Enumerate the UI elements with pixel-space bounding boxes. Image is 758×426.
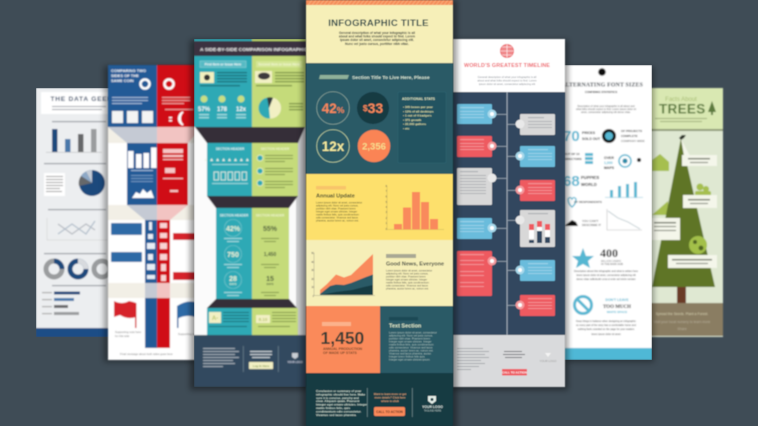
statistic: people: [564, 152, 593, 164]
paragraph: donec vitae sollicitudin urna ut enim ad minim veniam: [576, 278, 636, 281]
body text: [386, 268, 432, 290]
panel: footer: [306, 373, 453, 426]
right events: [516, 114, 555, 316]
footer: [194, 335, 306, 387]
donut stat: OF PROJECTS: [621, 129, 642, 133]
body text: Integer eget ornare ultricies. Integer: [316, 210, 357, 214]
column: teal top: 12x: [236, 107, 247, 113]
summary text: infographic should live here. Make: [316, 392, 366, 396]
heading: SIDES OF THE: [111, 73, 139, 78]
callout: don't leave: WHITE SPACE: [607, 310, 627, 314]
callout: don't leave: TOO MUCH: [603, 305, 631, 310]
panel: alternating font sizes: [561, 65, 652, 360]
statistic: 400: IN THE MAIN HUB: [601, 262, 623, 266]
paragraph lines: [112, 97, 148, 104]
pie chart: [79, 170, 105, 196]
target stat: 1,000: [604, 161, 613, 165]
heading: WORLD'S GREATEST TIMELINE: [464, 63, 550, 69]
heading: facts about trees: TREES: [659, 102, 706, 116]
area chart: 30: [311, 269, 315, 272]
icon tiles: [112, 111, 153, 123]
logo: [422, 396, 443, 412]
body text: Vivamus sed lacus pharetra, auctor.: [389, 352, 432, 356]
caption: ANNUAL PRODUCTION: [323, 347, 363, 351]
section: stats teal: 42%: [226, 226, 241, 233]
callout: don't leave: [603, 298, 631, 314]
caption lines: Final message about both sides goes here: [120, 352, 173, 356]
stat: $33: 33: [368, 100, 383, 116]
body text: Integer lorem finibus felis quis.: [389, 354, 426, 358]
bar graphic panel: [127, 143, 188, 205]
mountain stat: [564, 219, 601, 227]
body text: [389, 330, 437, 362]
histogram: 3: [386, 211, 388, 214]
icon: red flag: [114, 301, 136, 328]
stat: $33: [357, 92, 389, 124]
shadow: timeline panel: [452, 40, 568, 390]
header: [306, 0, 453, 63]
statistic: 68 puppies: 68: [563, 173, 580, 190]
section: stats teal: 28: [229, 276, 237, 283]
column: teal top: 57%: [198, 107, 211, 113]
timeline connectors: [493, 114, 521, 306]
body text: Integer eget ornare ultricies. Integer: [389, 340, 432, 344]
footer: YOUR LOGO: [287, 361, 303, 364]
intro text: [477, 75, 537, 86]
paragraph: [574, 270, 639, 281]
callout text: [654, 158, 712, 264]
logo: YOUR LOGO: [422, 405, 443, 409]
statistic: 400: 400: [600, 246, 618, 260]
icon: blue flag: [177, 302, 195, 328]
closing paragraph: [576, 320, 637, 336]
panel: timeline: [453, 39, 565, 387]
area chart: [311, 252, 375, 298]
heading: COMPARING TWO: [111, 68, 146, 73]
footer: CALL TO ACTION: [502, 371, 527, 375]
summary text: Conclusion or summary of your: [316, 389, 362, 393]
icon: equals and crescent: [169, 112, 183, 125]
target stat: MAPS: [604, 166, 615, 170]
footer: Log In Here: [253, 364, 270, 368]
title: INFOGRAPHIC TITLE: [328, 18, 429, 29]
summary text: condimentum odio consectetur.: [316, 409, 362, 413]
stat: 42%: [317, 92, 349, 124]
body text: mattis finibus felis, quis condimentum: [389, 342, 434, 346]
mountain stat: DESCRIBE IT: [582, 223, 601, 227]
bar chart: [46, 129, 102, 153]
statistic: 70: 70: [563, 128, 580, 145]
closing paragraph: nothing feels crowded on the page for your readers: [578, 328, 635, 331]
funnel band 2: [207, 196, 298, 208]
caption: [323, 347, 363, 355]
column: teal top: [194, 56, 252, 127]
heading: CONFIDING STATISTICS: [585, 90, 617, 94]
body text: adipiscing elit. Nunc vel justo cursus,: [386, 272, 429, 276]
intro text: what folks should expect to find. Lorem ipsum dolor sit: [576, 108, 636, 111]
intro text: [576, 105, 636, 114]
call to action text: more details? Click here: [374, 396, 406, 400]
icon: house: [652, 154, 669, 171]
grade row: 8.10: [259, 317, 268, 322]
paragraph: lorem ipsum dolor sit amet, consectetur adipiscing elit: [576, 274, 636, 277]
mountain stat: YOU CAN'T: [582, 219, 599, 223]
statistic: 70: [564, 130, 600, 142]
intro text: General description of what your infographic is all: [478, 75, 537, 79]
bar chart: [605, 182, 643, 198]
body text: adipiscing elit. Nunc vel justo cursus,: [389, 334, 433, 338]
callout: don't leave: DON'T LEAVE: [605, 298, 629, 302]
panel: stats: [306, 63, 453, 174]
section: icons teal: SECTION HEADER: [216, 147, 245, 151]
description: ipsum dolor sit amet, consectetur adipiscing elit.: [340, 38, 414, 42]
heading: Text Section: [389, 324, 422, 330]
panel: good news: [306, 240, 453, 306]
section: stats green: 1,450: [264, 252, 276, 258]
icon: no sign: [574, 296, 592, 314]
intro text: ipsum dolor sit amet, consectetur adipiscing elit: [479, 82, 535, 86]
section: stats teal: DAYS: [230, 282, 237, 286]
statistic: people: DIRECTORS: [564, 157, 582, 161]
stat: 2,356: 2,356: [362, 142, 386, 152]
summary text: Integer eget ornare ultricies. Integer: [316, 403, 368, 407]
icon: people: [695, 184, 711, 196]
body text: Integer eget ornare ultricies ipsum.: [389, 358, 431, 362]
shadow: fonts panel: [566, 67, 654, 362]
column: teal top: First Item or Issue Here: [205, 63, 241, 67]
histogram: 5: [386, 201, 388, 204]
statistic: 70: SOLD OUT: [582, 137, 601, 141]
stat: 2,356: [358, 130, 390, 162]
shadow: comparison panel: [190, 40, 308, 390]
stat: 42%: 42%: [322, 101, 345, 116]
grade row: A-: [212, 316, 218, 322]
donut stat: COMPANY-WIDE: [621, 139, 645, 143]
closing paragraph: lorem ipsum dolor sit amet: [591, 333, 621, 336]
panel: 1,450 stat: [306, 306, 380, 373]
line chart: [607, 209, 642, 230]
pie chart: [258, 97, 281, 119]
button: CALL TO ACTION: [376, 410, 404, 414]
additional stats: • 345 boxes per year: [403, 105, 434, 109]
body text: mattis finibus felis, quis condimentum: [316, 212, 359, 216]
summary text: mattis finibus felis, quis: [316, 406, 351, 410]
statistic: 68 puppies: PUPPIES: [581, 175, 599, 180]
grade row: [207, 308, 298, 335]
funnel 2: [108, 205, 195, 220]
summary text: sure it is concise, punchy and: [316, 396, 359, 400]
line chart: [46, 220, 96, 240]
statistic: 400: [600, 246, 623, 266]
body text: pharetra, auctor lorem ac, rutrum est.: [316, 218, 359, 222]
stat: 12x: 12x: [322, 139, 345, 154]
intro lines: [52, 106, 106, 110]
statistic: 68 puppies: WORLD: [581, 182, 597, 187]
section: stats green: SECTION HEADER: [256, 214, 285, 218]
donut charts: [46, 261, 110, 277]
tree illustration: [652, 135, 715, 303]
area chart: 0: [313, 295, 315, 298]
section: stats teal: [216, 208, 252, 299]
bar labels: [42, 292, 52, 314]
body text: Lorem ipsum dolor sit amet, consectetur: [316, 200, 362, 204]
subtitle lines: [655, 118, 707, 122]
panel: main infographic: [306, 0, 453, 426]
body text: [316, 200, 362, 222]
shadow: red panel: [104, 66, 196, 362]
icon: triangle: [652, 201, 668, 215]
histogram: 0: [386, 228, 388, 231]
text block: [44, 173, 65, 196]
panel: comparing two sides: [108, 65, 198, 360]
summary text: Vivamus sed lacus pharetra.: [316, 413, 357, 417]
heading: [561, 82, 643, 94]
funnel 1: [108, 127, 195, 143]
body text: porttitor nibh vitae. Praesent lorem: [316, 206, 356, 210]
side labels: [111, 223, 195, 280]
body text: odio consectetur. Vivamus sed lacus: [316, 216, 359, 220]
body text: mattis finibus felis, quis condimentum: [386, 280, 429, 284]
timeline axis: [506, 92, 508, 335]
heading: [111, 68, 146, 83]
button: [374, 407, 405, 416]
left events: [457, 104, 496, 296]
horizontal bars: [54, 292, 80, 315]
funnel band 3: [207, 299, 297, 308]
target stat: OVER: [604, 156, 614, 160]
histogram: 2: [386, 217, 388, 220]
heart stat: OF RESPONDENTS: [574, 200, 602, 204]
call to action text: [374, 392, 406, 403]
logo: TAGLINE HERE: [424, 410, 442, 412]
statistic: 70: PRICES: [582, 131, 596, 135]
footer: [457, 348, 557, 376]
icon: black dot: [598, 68, 606, 76]
additional stats: • 22,000 gallons: [403, 122, 426, 126]
histogram: 8: [386, 185, 388, 188]
statistic: 400: MILLION USERS: [601, 259, 621, 263]
closing paragraph: so every part of the story has a comfortable home and: [576, 324, 637, 327]
histogram: [386, 185, 444, 231]
target stat: [604, 155, 641, 170]
body text: odio consectetur. Vivamus sed lacus: [389, 346, 433, 350]
heading: facts about trees: Facts About: [665, 97, 697, 103]
heading: Good News, Everyone: [386, 262, 444, 268]
body text: porttitor nibh vitae. Praesent lorem: [389, 336, 431, 340]
additional stats: • 1 out of 4 badgers: [403, 114, 432, 118]
caption lines: [115, 330, 198, 356]
description: about and what folks should expect to find. Lorem: [339, 35, 415, 39]
section title bar: [319, 75, 349, 79]
shadow: center panel: [302, 0, 457, 426]
body text: porttitor nibh vitae. Praesent lorem: [386, 274, 426, 278]
icon: star: [572, 248, 594, 268]
stat: 12x: [317, 130, 349, 162]
column: teal top: 178: [217, 107, 228, 113]
striped column: [145, 298, 170, 348]
panel: trees: [645, 88, 723, 337]
call to action text: where to click: [380, 399, 399, 403]
footer text: Visit your local nursery to learn more: [654, 320, 710, 324]
donut stat: [604, 129, 645, 143]
section: stats teal: 750: [227, 252, 239, 259]
section: icons teal: [203, 143, 257, 196]
caption lines: Supporting note: [178, 332, 198, 336]
icon: small tree: [708, 101, 716, 115]
funnel band 1: [195, 127, 305, 143]
heading: the data geek: THE DATA GEEK: [50, 96, 113, 103]
stat: $33: $: [363, 103, 368, 113]
caption lines: for this side: [115, 334, 130, 338]
footer: YOUR LOGO: [540, 359, 557, 363]
body text: Lorem ipsum dolor sit amet, consectetur: [389, 330, 437, 334]
area chart: 40: [311, 261, 315, 264]
footer text: Share: [677, 327, 687, 331]
closing paragraph: Keep things in balance when designing an infographic: [576, 320, 637, 323]
body text: Lorem ipsum dolor sit amet, consectetur: [386, 268, 432, 272]
additional stats: ADDITIONAL STATS: [402, 97, 436, 101]
number: 1,450: [320, 328, 365, 348]
section: list green: SECTION HEADER: [261, 147, 290, 151]
summary text: clear. Aliquam quam. Praesent: [316, 399, 359, 403]
additional stats: • etc: [403, 126, 410, 130]
section: stats green: [252, 208, 289, 299]
histogram: 4: [386, 206, 388, 209]
statistic: people: OUT OF 10: [564, 152, 580, 156]
caption lines: Supporting note here: [115, 330, 142, 334]
histogram: 6: [386, 196, 388, 198]
intro text: amet, consectetur adipiscing elit donec vitae.: [581, 111, 631, 114]
body text: adipiscing elit. Nunc vel justo cursus,: [316, 204, 359, 208]
intro text: Description of what your infographic is all about and: [577, 105, 635, 108]
heading: SAME COIN: [111, 78, 134, 83]
caption: OF MADE UP STATS: [323, 351, 358, 355]
area chart: 20: [311, 278, 315, 281]
additional stats: • 371 growth: [403, 118, 421, 122]
panel: the data geek: [36, 88, 109, 337]
panel: annual update: [306, 174, 453, 240]
area chart: 50: [311, 252, 315, 255]
body text: odio consectetur. Vivamus sed lacus: [386, 284, 429, 288]
histogram: 1: [386, 222, 388, 225]
histogram: 7: [386, 190, 388, 193]
body text: pharetra, auctor lorem ac, rutrum est.: [386, 286, 429, 290]
description: [339, 31, 415, 46]
footer text: Spread the Seeds. Plant a Forest.: [656, 312, 708, 316]
description: General description of what your infographic is all: [339, 31, 415, 35]
section title: Section Title To Live Here, Please: [352, 75, 430, 81]
tree callouts: [650, 155, 717, 268]
section: stats green: DAYS: [267, 282, 274, 286]
body text: Integer eget ornare ultricies. Integer: [386, 278, 427, 282]
intro text: about and what folks should expect to find. Lorem: [477, 78, 537, 82]
call to action text: Want to learn more or get: [374, 392, 406, 396]
section: list green: [252, 143, 298, 196]
additional stats: [398, 92, 446, 163]
panel: side-by-side comparison: [194, 39, 308, 387]
icon: globe: [500, 44, 514, 58]
icon column: [145, 220, 170, 283]
column: green top: [252, 56, 306, 127]
heading: ALTERNATING FONT SIZES: [561, 82, 643, 88]
summary text: [316, 389, 368, 417]
additional stats: • 13% of all desktops: [403, 109, 434, 113]
section captions: [44, 121, 106, 286]
band: [108, 283, 195, 298]
panel: text section: [380, 306, 453, 373]
statistic: 68 puppies: [564, 175, 600, 187]
donut stat: COMPLETE: [621, 134, 638, 138]
icons: people: [140, 80, 174, 88]
heading: Annual Update: [316, 194, 355, 200]
heart stat: [568, 198, 602, 207]
body text: pharetra, auctor lorem ac, rutrum est.: [389, 348, 434, 352]
section: stats green: 55%: [263, 226, 278, 233]
section: stats green: 15: [266, 276, 274, 283]
description: Nunc vel justo cursus, porttitor nibh vitae.: [345, 42, 409, 46]
section: stats teal: SECTION HEADER: [220, 214, 249, 218]
paragraph: Description about this infographic and what is written here: [574, 270, 639, 273]
area chart: 10: [311, 286, 315, 289]
column: green top: Second Item or Issue Here: [258, 63, 300, 67]
section: icons teal: ▲▲▲▲▲▲▲▲▲: [203, 157, 257, 163]
footer text: [654, 312, 710, 331]
heading: A SIDE-BY-SIDE COMPARISON INFOGRAPHIC: [200, 47, 308, 53]
